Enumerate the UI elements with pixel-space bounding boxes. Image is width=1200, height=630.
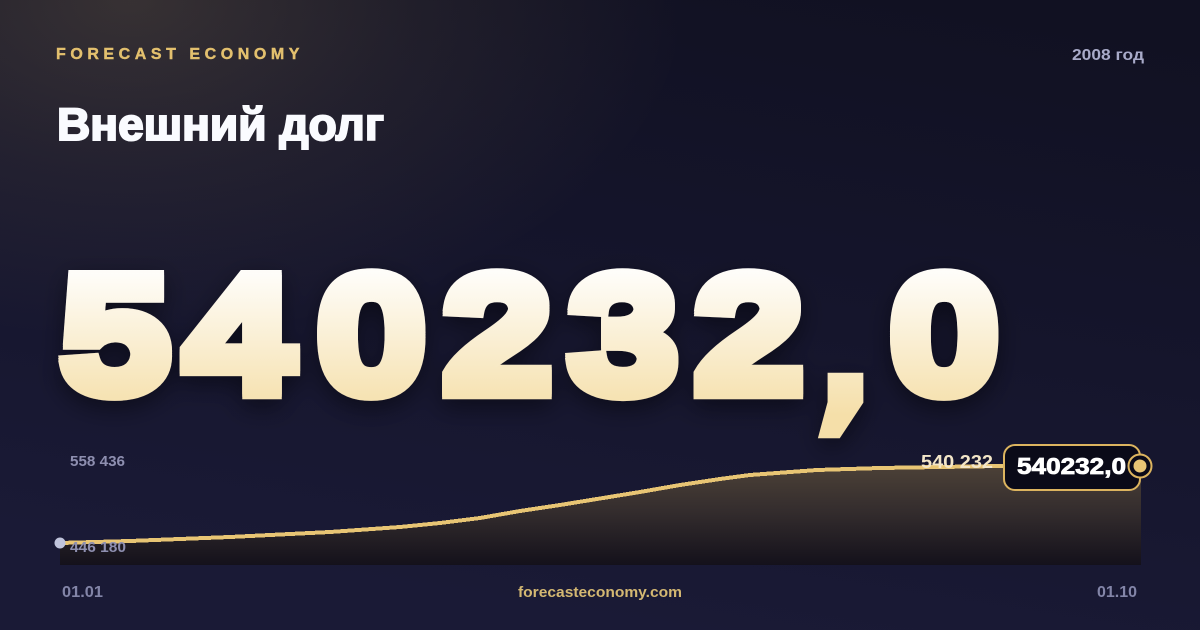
end marker: [1128, 454, 1152, 478]
main value: 5402320: [60, 242, 1000, 426]
end value label: 540 232: [921, 451, 993, 472]
start point: [54, 538, 66, 548]
start date: 01.01: [62, 584, 103, 601]
title: Внешний долг: [57, 99, 384, 150]
website: forecasteconomy.com: [518, 584, 682, 601]
value badge: 540232,0: [1017, 453, 1126, 479]
year label: 2008 год: [1072, 47, 1144, 64]
chart line: [60, 466, 1140, 543]
main value: ,: [809, 233, 882, 456]
end date: 01.10: [1097, 584, 1137, 601]
min axis label: 446 180: [70, 539, 126, 556]
area chart: [54, 466, 1141, 565]
brand heading: FORECAST ECONOMY: [56, 46, 304, 63]
value badge: [1004, 445, 1140, 490]
chart area fill: [60, 466, 1141, 565]
max axis label: 558 436: [70, 453, 125, 470]
